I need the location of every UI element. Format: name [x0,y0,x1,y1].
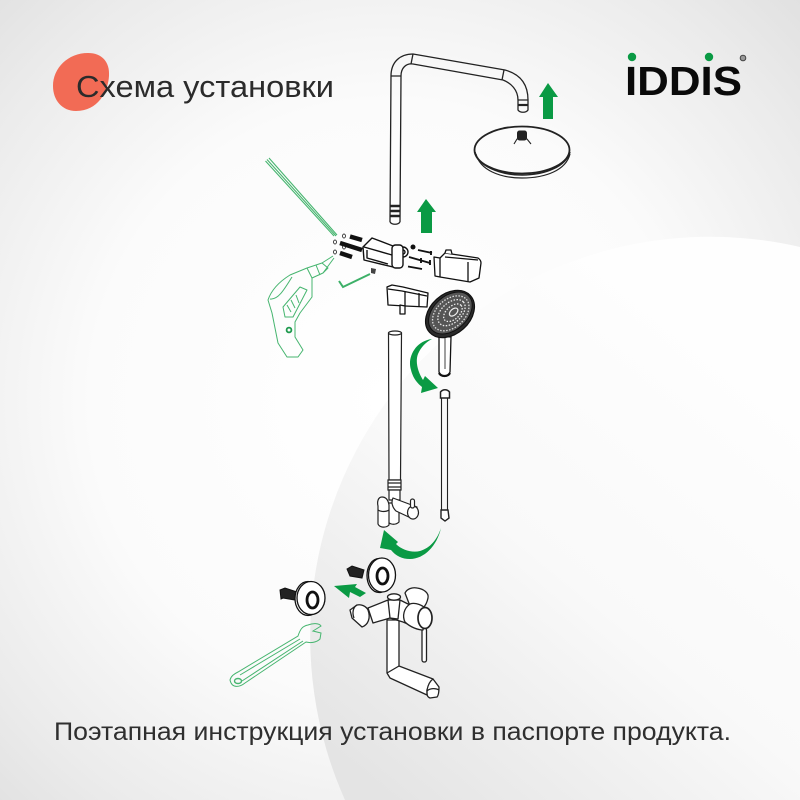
wall flange left [280,582,325,616]
bracket cover [434,250,481,282]
arrow left [334,584,366,598]
pencil [266,158,337,236]
hex key [339,274,370,287]
wall screw holes [334,234,346,254]
wall plugs [340,236,362,257]
screws and cap [408,244,432,269]
title [53,53,334,111]
diverter [378,490,418,527]
arrow up: bracket [417,199,436,233]
riser pipe [390,54,528,224]
hand shower [416,281,484,376]
slide rail [388,331,402,490]
shower holder [387,285,428,314]
mounting bracket [363,238,408,268]
grub screw [371,268,376,274]
shower hose [440,390,450,521]
heading text: Схема установки [76,69,334,104]
background circle [310,237,800,800]
drill [268,256,334,357]
coral blob [53,53,109,111]
wall flange right [347,558,396,592]
caption: Поэтапная инструкция установки в паспорте продукта. [54,718,731,746]
arrow up: shower head [539,83,558,119]
wrench [230,624,321,686]
rain shower head [474,126,570,178]
bath mixer [350,588,439,698]
arrow curved: hose to diverter [380,528,441,559]
arrow curved: hand shower to hose [410,339,438,393]
logo: IDDIS: IDDIS [625,58,742,104]
